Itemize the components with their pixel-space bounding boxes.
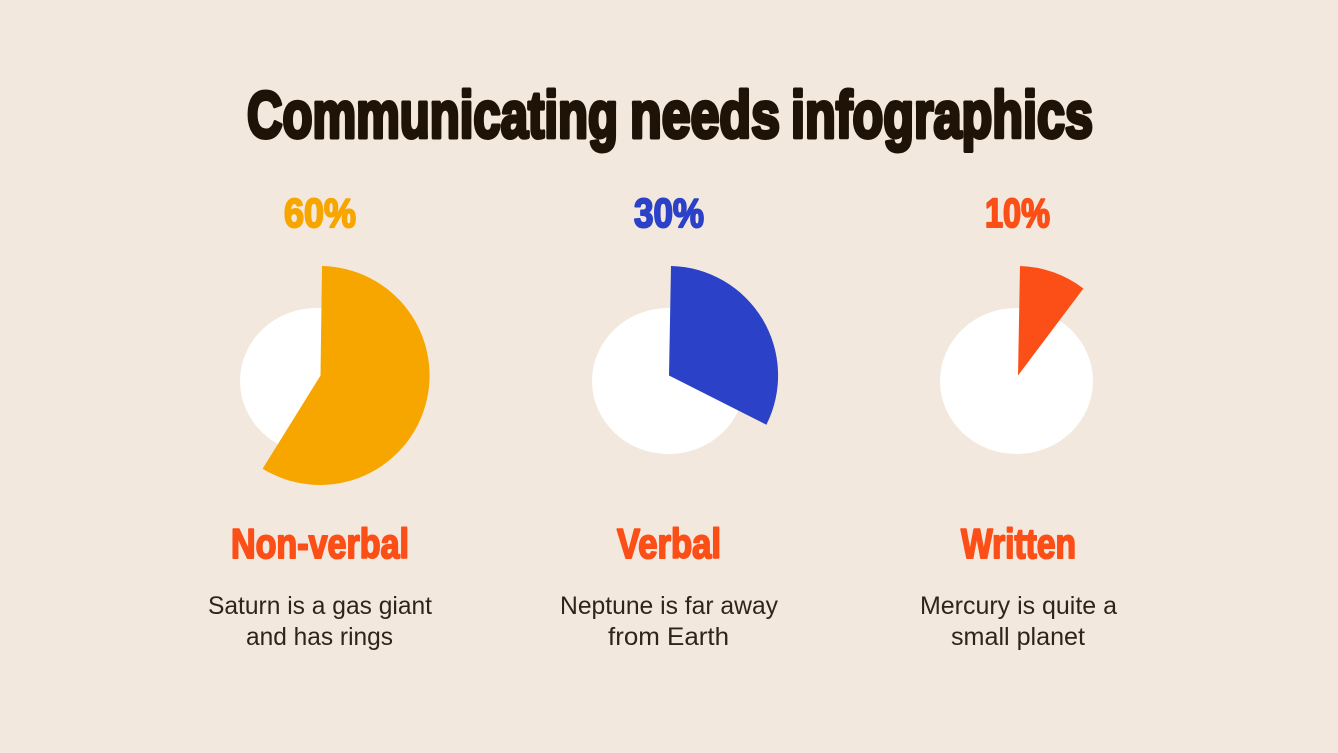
- pie chart: 30%: [592, 266, 778, 454]
- title: Communicating: [247, 78, 618, 152]
- text: verbal description: Neptune is far away: [560, 592, 778, 620]
- title: infographics: [791, 78, 1093, 152]
- panel: non-verbal: [208, 190, 432, 651]
- text: non-verbal description: Saturn is a gas giant: [208, 592, 432, 620]
- text: written description: small planet: [951, 623, 1085, 651]
- pie chart: 60%: [240, 266, 430, 485]
- heading: verbal: Verbal: [617, 520, 721, 567]
- percentage: 30%: 30%: [634, 190, 704, 236]
- heading: written: Written: [961, 520, 1076, 567]
- pie chart: 10%: [940, 266, 1093, 454]
- text: non-verbal description: and has rings: [246, 623, 393, 651]
- text: non-verbal description: [208, 592, 432, 651]
- title: [247, 78, 1093, 152]
- heading: non-verbal: Non-verbal: [231, 520, 409, 567]
- percentage: 60%: 60%: [284, 190, 356, 236]
- text: verbal description: from Earth: [608, 623, 729, 651]
- title: needs: [630, 78, 780, 152]
- text: verbal description: [560, 592, 778, 651]
- text: written description: [920, 592, 1117, 651]
- text: written description: Mercury is quite a: [920, 592, 1117, 620]
- panel: written: [920, 190, 1117, 651]
- percentage: 10%: 10%: [985, 190, 1050, 236]
- panel: verbal: [560, 190, 778, 651]
